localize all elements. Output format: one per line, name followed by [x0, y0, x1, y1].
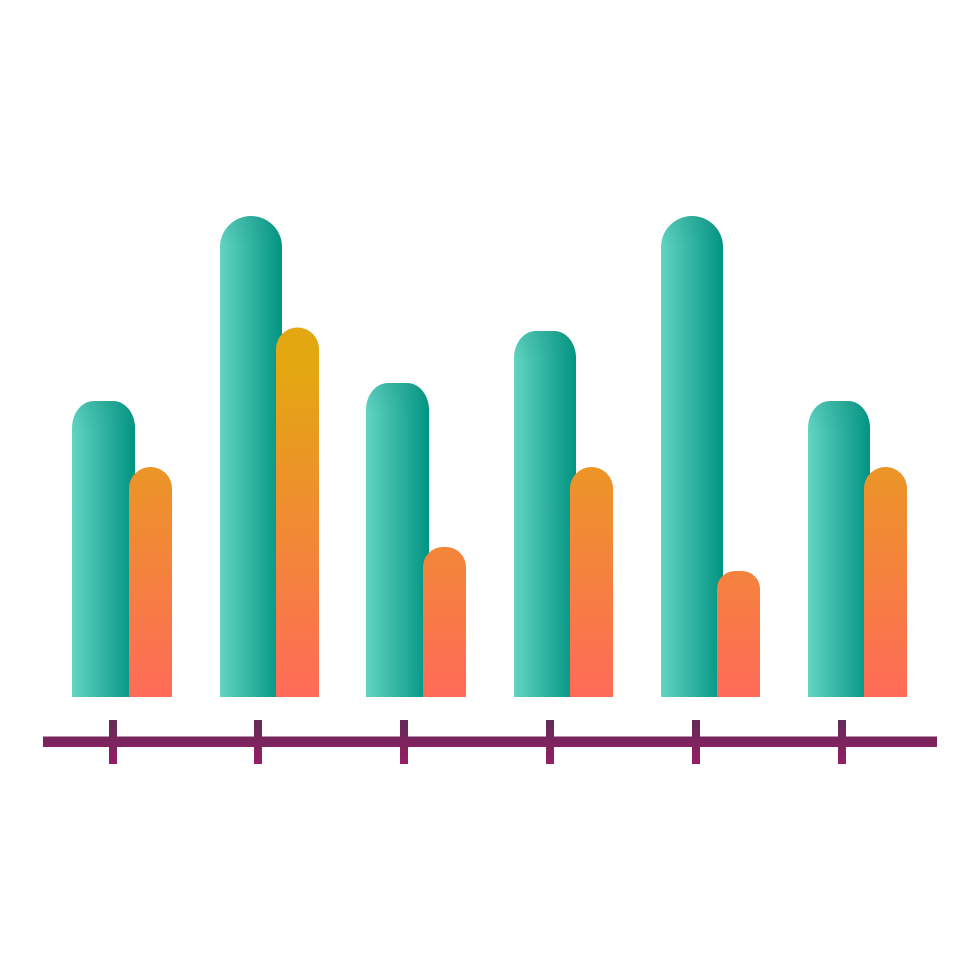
bar group 2: [220, 216, 319, 697]
bar group 1: [72, 401, 172, 697]
bar group 3: [366, 383, 466, 697]
bar group 5: [661, 216, 760, 697]
bar group 4: [514, 331, 613, 697]
bar group 6: [808, 401, 907, 697]
axis with tick marks: [43, 720, 937, 764]
